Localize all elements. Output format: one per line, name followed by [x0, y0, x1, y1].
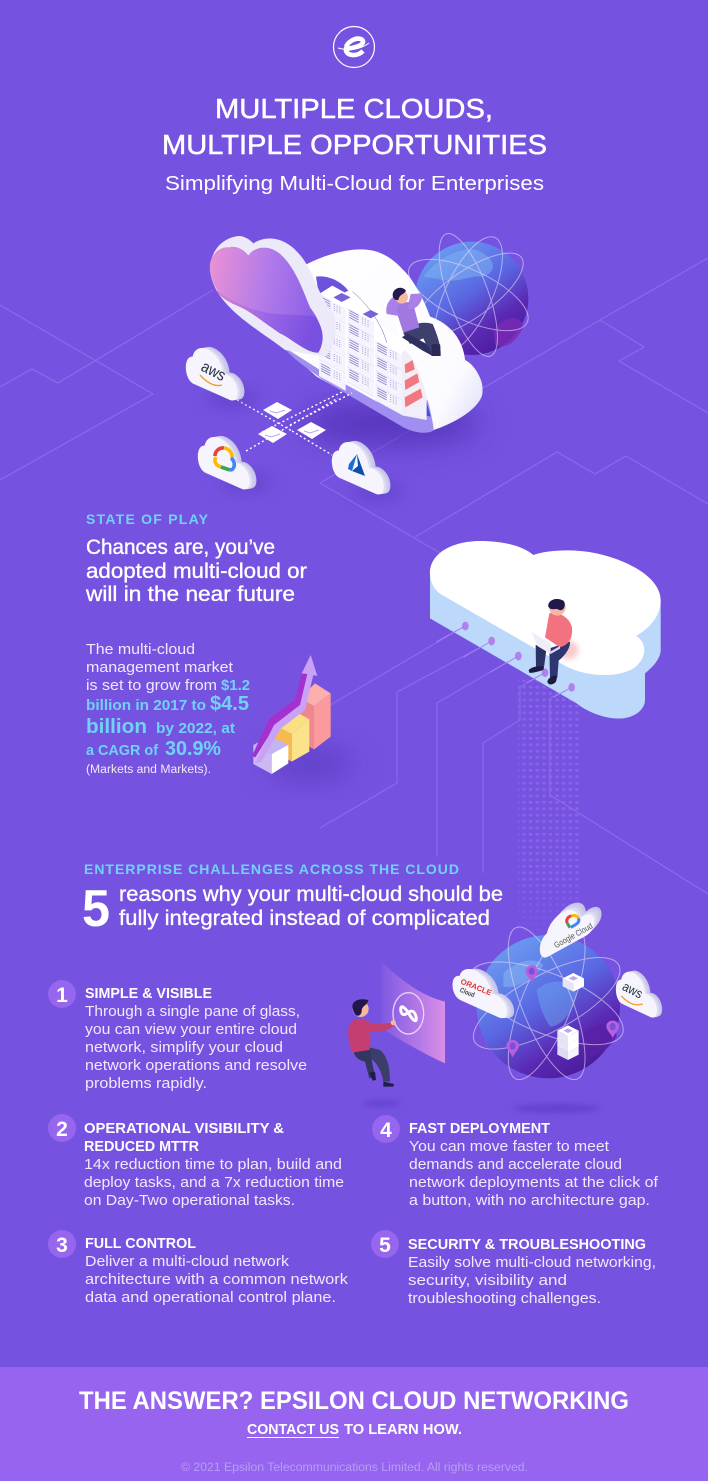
reason 4: You can move faster to meet: [409, 1138, 610, 1155]
number badge: 2: [56, 1118, 68, 1141]
back pink cloud: [210, 236, 336, 357]
icon: azure cloud: [332, 430, 404, 500]
call to action: TO LEARN HOW.: [344, 1422, 462, 1438]
market growth text: management market: [86, 659, 234, 676]
number badge: [371, 1230, 399, 1258]
reason 4: network deployments at the click of: [409, 1174, 659, 1191]
icon: aws cloud: [186, 336, 258, 408]
big number five: 5: [82, 880, 110, 938]
illustration: person at glass pane and globe with clouds: [348, 887, 662, 1113]
reason 3: Deliver a multi-cloud network: [85, 1253, 290, 1270]
market growth text: The multi-cloud: [86, 641, 195, 658]
footer band: [0, 1367, 708, 1481]
title: MULTIPLE OPPORTUNITIES: [162, 129, 547, 160]
section heading: fully integrated instead of complicated: [119, 907, 490, 930]
number badge: [48, 1230, 76, 1258]
number badge: [372, 1115, 400, 1143]
reason 2: 14x reduction time to plan, build and: [84, 1156, 342, 1173]
connector lines and checkbox tiles: [237, 392, 352, 455]
section heading: [119, 883, 503, 930]
white cloud platform with person: [430, 541, 661, 719]
section label: ENTERPRISE CHALLENGES ACROSS THE CLOUD: [84, 861, 459, 877]
market growth text: a CAGR of: [86, 742, 159, 759]
number badge: 5: [379, 1234, 391, 1257]
reason 3: data and operational control plane.: [85, 1289, 336, 1306]
reason 4: a button, with no architecture gap.: [409, 1192, 650, 1209]
reason 1: problems rapidly.: [85, 1075, 207, 1092]
section: state of play: [85, 511, 307, 606]
market growth text: is set to grow from: [86, 677, 217, 694]
market growth text: [86, 641, 250, 776]
dark interior: [316, 276, 348, 302]
reason 5: troubleshooting challenges.: [408, 1290, 601, 1307]
copyright: © 2021 Epsilon Telecommunications Limited. All rights reserved.: [181, 1462, 528, 1474]
server stacks: [319, 286, 427, 420]
icon: bar chart with rising arrow: [252, 655, 353, 780]
lower lavender band: [283, 347, 434, 433]
icon: google cloud badge: [540, 887, 602, 961]
icon: aws cloud badge: [616, 961, 662, 1023]
market growth text: $1.2: [221, 677, 250, 694]
icon: google cloud: [198, 425, 271, 495]
reason 4: demands and accelerate cloud: [409, 1156, 622, 1173]
section heading: Chances are, you’ve: [86, 536, 275, 559]
person relaxing: [386, 288, 441, 356]
reason 5: [371, 1230, 656, 1307]
icon: globe: [399, 227, 538, 363]
map pins: [506, 965, 619, 1057]
market growth text: (Markets and Markets).: [86, 764, 211, 776]
footer headline: THE ANSWER? EPSILON CLOUD NETWORKING: [79, 1387, 629, 1415]
number badge: [48, 980, 76, 1008]
market growth text: $4.5: [210, 693, 249, 715]
icon: oracle cloud badge: Cloud: [459, 987, 475, 999]
section heading: adopted multi-cloud or: [86, 560, 307, 583]
dotted data column: [518, 680, 578, 911]
reason 3: FULL CONTROL: [85, 1236, 196, 1252]
market growth text: by 2022, at: [156, 720, 235, 737]
icon: google cloud badge: Google Cloud: [552, 921, 595, 950]
market growth text: 30.9%: [165, 738, 221, 760]
reason 2: REDUCED MTTR: [84, 1139, 200, 1155]
call to action: [247, 1422, 462, 1438]
reason 1: you can view your entire cloud: [85, 1021, 297, 1038]
connector dots: [462, 622, 575, 692]
reason 3: [48, 1230, 349, 1306]
reason 5: security, visibility and: [408, 1272, 567, 1289]
number badge: 1: [56, 984, 68, 1007]
icon: oracle cloud badge: [452, 957, 514, 1024]
reason 1: SIMPLE & VISIBLE: [85, 986, 212, 1002]
globe: [460, 918, 634, 1088]
reason 1: network, simplify your cloud: [85, 1039, 283, 1056]
title: MULTIPLE CLOUDS,: [215, 93, 493, 124]
main white cloud body: [285, 249, 483, 431]
icon: oracle cloud badge: ORACLE: [459, 977, 493, 997]
icon: aws cloud badge: aws: [620, 979, 645, 1002]
reason 2: deploy tasks, and a 7x reduction time: [84, 1174, 344, 1191]
section heading: will in the near future: [85, 583, 295, 606]
market growth text: billion: [86, 715, 147, 738]
logo: [334, 26, 374, 68]
reason 1: network operations and resolve: [85, 1057, 307, 1074]
section heading: reasons why your multi-cloud should be: [119, 883, 503, 906]
front white cloud lobe: [395, 270, 483, 430]
reason 3: architecture with a common network: [85, 1271, 349, 1288]
reason 2: OPERATIONAL VISIBILITY &: [84, 1121, 285, 1137]
reason 2: on Day-Two operational tasks.: [84, 1192, 295, 1209]
number badge: 4: [380, 1119, 392, 1142]
cloud top: [430, 541, 661, 675]
number badge: 3: [56, 1234, 68, 1257]
reason 2: [48, 1114, 344, 1209]
section: enterprise challenges header: [82, 861, 503, 938]
subtitle: Simplifying Multi-Cloud for Enterprises: [165, 172, 544, 195]
person with laptop: [529, 599, 578, 685]
reason 5: Easily solve multi-cloud networking,: [408, 1254, 656, 1271]
call to action: CONTACT US: [247, 1422, 339, 1438]
background circuit lines: [0, 258, 708, 894]
icon: aws cloud: aws: [198, 358, 228, 385]
reason 5: SECURITY & TROUBLESHOOTING: [408, 1237, 646, 1253]
reason 1: [48, 980, 307, 1092]
glass pane: [382, 962, 445, 1063]
hero illustration: cloud with servers: [210, 227, 538, 447]
section heading: [85, 536, 307, 606]
reason 1: Through a single pane of glass,: [85, 1003, 300, 1020]
cloud side wall: [430, 575, 661, 719]
number badge: [48, 1114, 76, 1142]
reason 4: [372, 1115, 659, 1209]
title: [162, 93, 547, 160]
section label: STATE OF PLAY: [86, 511, 209, 527]
server cubes: [557, 973, 584, 1060]
reason 4: FAST DEPLOYMENT: [409, 1121, 550, 1137]
person pointing: [348, 999, 396, 1087]
market growth text: billion in 2017 to: [86, 697, 206, 714]
